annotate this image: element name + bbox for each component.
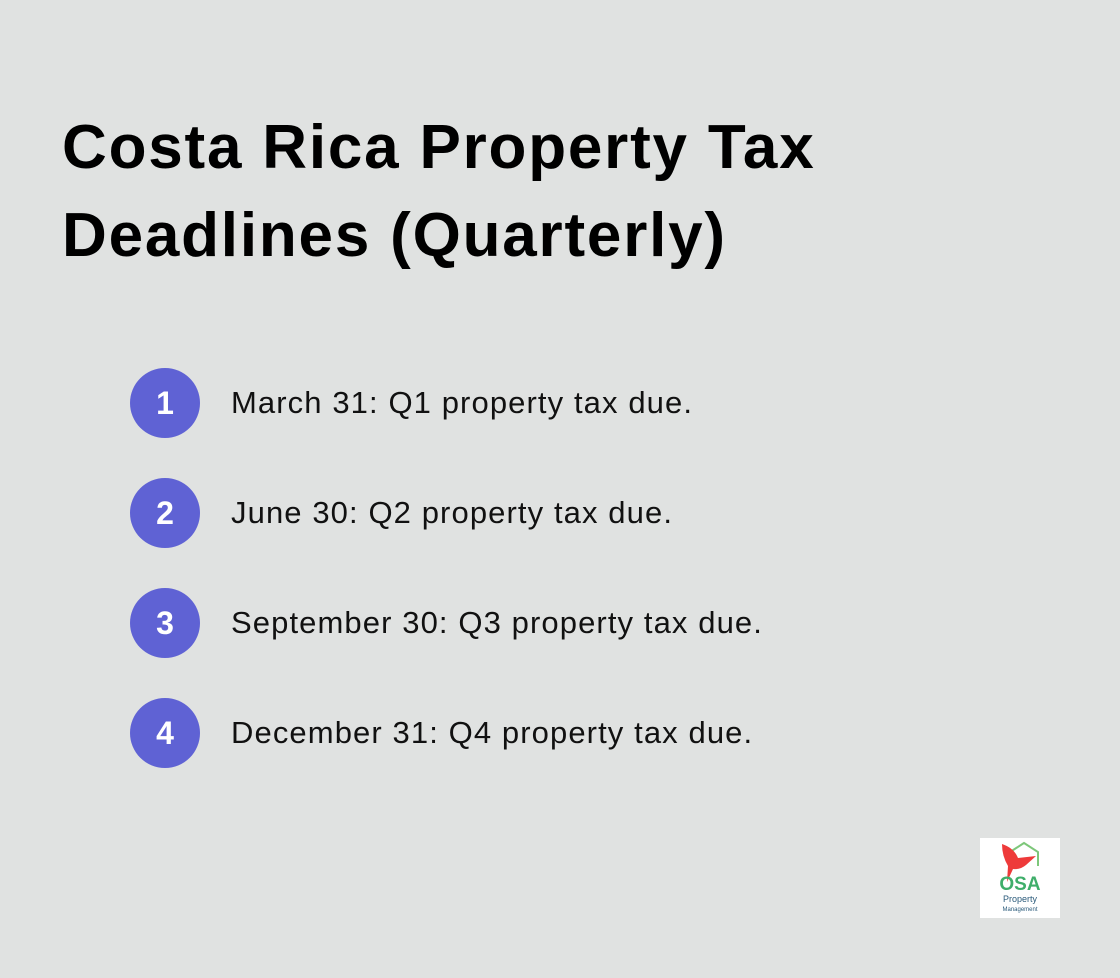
item 1: March 31: Q1 property tax due. [231,385,693,420]
logo: OSA [999,874,1041,895]
logo [980,838,1060,918]
item 4 [130,698,753,768]
logo: Property [1003,894,1038,904]
item 3: 3 [156,605,174,641]
item 3 [130,588,763,658]
title: Costa Rica Property Tax [62,113,816,182]
item 3: September 30: Q3 property tax due. [231,605,763,640]
item 1: 1 [156,385,174,421]
item 1 [130,368,693,438]
logo: Management [1002,907,1038,913]
item 2: June 30: Q2 property tax due. [231,495,673,530]
item 2: 2 [156,495,174,531]
item 4: 4 [156,715,174,751]
item 4: December 31: Q4 property tax due. [231,715,753,750]
item 2 [130,478,673,548]
title: Deadlines (Quarterly) [62,201,727,270]
title [62,113,816,270]
